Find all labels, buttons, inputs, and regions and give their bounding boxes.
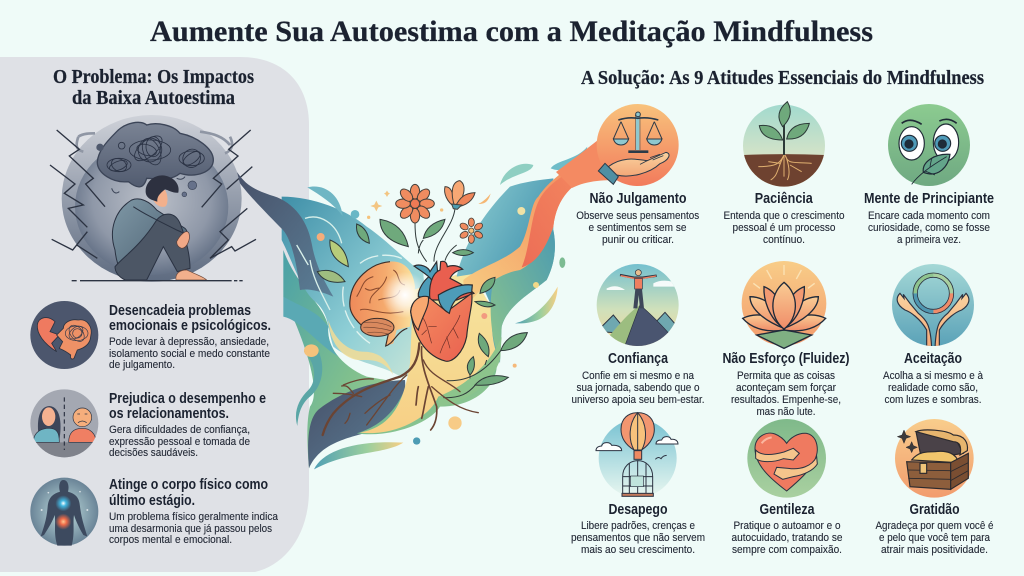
- text: performance and relationships: decisões saudáveis.: [109, 447, 198, 459]
- card: Confiança: [572, 264, 704, 406]
- card: Gratidão: [876, 419, 994, 556]
- flower: large: [396, 184, 434, 223]
- name: Desapego: [608, 502, 668, 518]
- description: Observe seus pensamentos: [576, 210, 699, 222]
- name: Gratidão: [910, 502, 960, 518]
- heart: [411, 261, 474, 361]
- icon: arms hugging a heart: [747, 419, 826, 498]
- text: emotional problems: [109, 303, 271, 371]
- description: a primeira vez.: [897, 234, 961, 246]
- description: pensamentos que não servem: [571, 532, 705, 544]
- heading: problem: da Baixa Autoestima: [72, 88, 235, 109]
- illustration: person overwhelmed by dark thoughts: [50, 115, 256, 282]
- description: mas não lute.: [756, 406, 816, 418]
- description: Confie em si mesmo e na: [582, 370, 695, 382]
- text: physical body: Atinge o corpo físico como: [109, 477, 268, 493]
- description: contínuo.: [763, 234, 805, 246]
- text: performance and relationships: expressão pessoal e tomada de: [109, 436, 250, 448]
- description: [572, 370, 704, 406]
- ribbon connecting to the first icon: [556, 132, 628, 188]
- description: e pelo que você tem para: [879, 532, 991, 544]
- name: Mente de Principiante: [864, 191, 994, 207]
- text: performance and relationships: [109, 391, 266, 459]
- flower: tulip: [445, 181, 475, 209]
- description: [731, 370, 841, 418]
- icon: curious eyes with leaf: [888, 104, 970, 186]
- description: resultados. Empenhe-se,: [731, 394, 841, 406]
- description: [883, 370, 984, 406]
- heading: problem: [53, 67, 254, 109]
- heading: solution: A Solução: As 9 Atitudes Essenciais do Mindfulness: [581, 68, 984, 89]
- text: emotional problems: Pode levar à depressão, ansiedade,: [109, 336, 269, 348]
- description: [571, 520, 705, 556]
- card: Mente de Principiante: [864, 104, 994, 246]
- icon: treasure chest: [895, 419, 974, 498]
- name: Aceitação: [904, 351, 962, 367]
- description: universo apoia seu bem-estar.: [572, 394, 704, 406]
- description: [732, 520, 842, 556]
- description: Libere padrões, crenças e: [581, 520, 695, 532]
- description: curiosidade, como se fosse: [868, 222, 990, 234]
- list item: performance and relationships: [30, 389, 266, 459]
- description: com luzes e sombras.: [884, 394, 982, 406]
- card: Aceitação: [883, 264, 984, 406]
- wisps and dots: [296, 147, 587, 469]
- card: Não Esforço: [722, 261, 850, 418]
- text: physical body: uma desarmonia que já passou pelos: [109, 523, 272, 535]
- description: Agradeça por quem você é: [876, 520, 994, 532]
- card: Não Julgamento: [576, 104, 699, 246]
- icon: lotus flower: [742, 261, 826, 348]
- roots: [323, 343, 478, 435]
- panel: problem background: [0, 57, 309, 572]
- icon: hands holding a ring: [892, 264, 974, 348]
- name: Gentileza: [760, 502, 815, 518]
- text: physical body: Um problema físico geralmente indica: [109, 511, 279, 523]
- description: sua jornada, sabendo que o: [576, 382, 700, 394]
- description: punir ou criticar.: [602, 234, 674, 246]
- text: emotional problems: emocionais e psicológicos.: [109, 318, 271, 334]
- description: aconteçam sem forçar: [736, 382, 836, 394]
- text: physical body: último estágio.: [109, 493, 195, 509]
- text: performance and relationships: os relacionamentos.: [109, 406, 229, 422]
- icon: body silhouette with glowing centers: [30, 478, 98, 546]
- name: Não Esforço (Fluidez): [722, 351, 850, 367]
- icon: balloon leaving a cage: [596, 413, 678, 497]
- description: atrair mais positividade.: [881, 544, 988, 556]
- icon: scales over open hand: [597, 104, 679, 186]
- description: [724, 210, 844, 246]
- icon: two separated people: [30, 389, 100, 459]
- description: Pratique o autoamor e o: [734, 520, 840, 532]
- description: autocuidado, tratando se: [732, 532, 842, 544]
- name: Confiança: [608, 351, 669, 367]
- text: performance and relationships: Prejudica o desempenho e: [109, 391, 266, 407]
- text: physical body: [109, 477, 279, 546]
- name: Não Julgamento: [590, 191, 687, 207]
- watercolor flows: [237, 153, 593, 468]
- central illustration: brain, heart and roots in a flowing wave: [237, 147, 593, 469]
- description: sempre com compaixão.: [732, 544, 842, 556]
- card: Paciência: [724, 102, 844, 246]
- icon: person on mountain top: [597, 264, 683, 350]
- description: [876, 520, 994, 556]
- stems and leaves: [317, 208, 527, 398]
- card: Gentileza: [732, 419, 842, 556]
- list item: physical body: [30, 477, 279, 546]
- description: Entenda que o crescimento: [724, 210, 844, 222]
- text: emotional problems: Desencadeia problemas: [109, 303, 251, 319]
- description: mais ao seu crescimento.: [581, 544, 695, 556]
- icon: seedling with roots: [743, 102, 825, 196]
- description: Encare cada momento com: [868, 210, 990, 222]
- text: performance and relationships: Gera dificuldades de confiança,: [109, 424, 250, 436]
- text: physical body: corpos mental e emocional.: [109, 534, 232, 546]
- brain: [350, 261, 428, 346]
- description: realidade como são,: [888, 382, 978, 394]
- description: Permita que as coisas: [737, 370, 835, 382]
- heading: problem: O Problema: Os Impactos: [53, 67, 254, 88]
- text: emotional problems: isolamento social e medo constante: [109, 348, 270, 360]
- description: pessoal é um processo: [732, 222, 836, 234]
- name: Paciência: [755, 191, 814, 207]
- list item: emotional problems: [30, 301, 271, 371]
- title: Aumente Sua Autoestima com a Meditação Mindfulness: [150, 15, 873, 48]
- description: e sentimentos sem se: [588, 222, 686, 234]
- description: [868, 210, 990, 246]
- icon: broken heart and tangled brain: [30, 301, 98, 369]
- card: Desapego: [571, 413, 705, 556]
- description: [576, 210, 699, 246]
- text: emotional problems: de julgamento.: [109, 359, 175, 371]
- description: Acolha a si mesmo e à: [883, 370, 984, 382]
- flower: small: [459, 218, 484, 243]
